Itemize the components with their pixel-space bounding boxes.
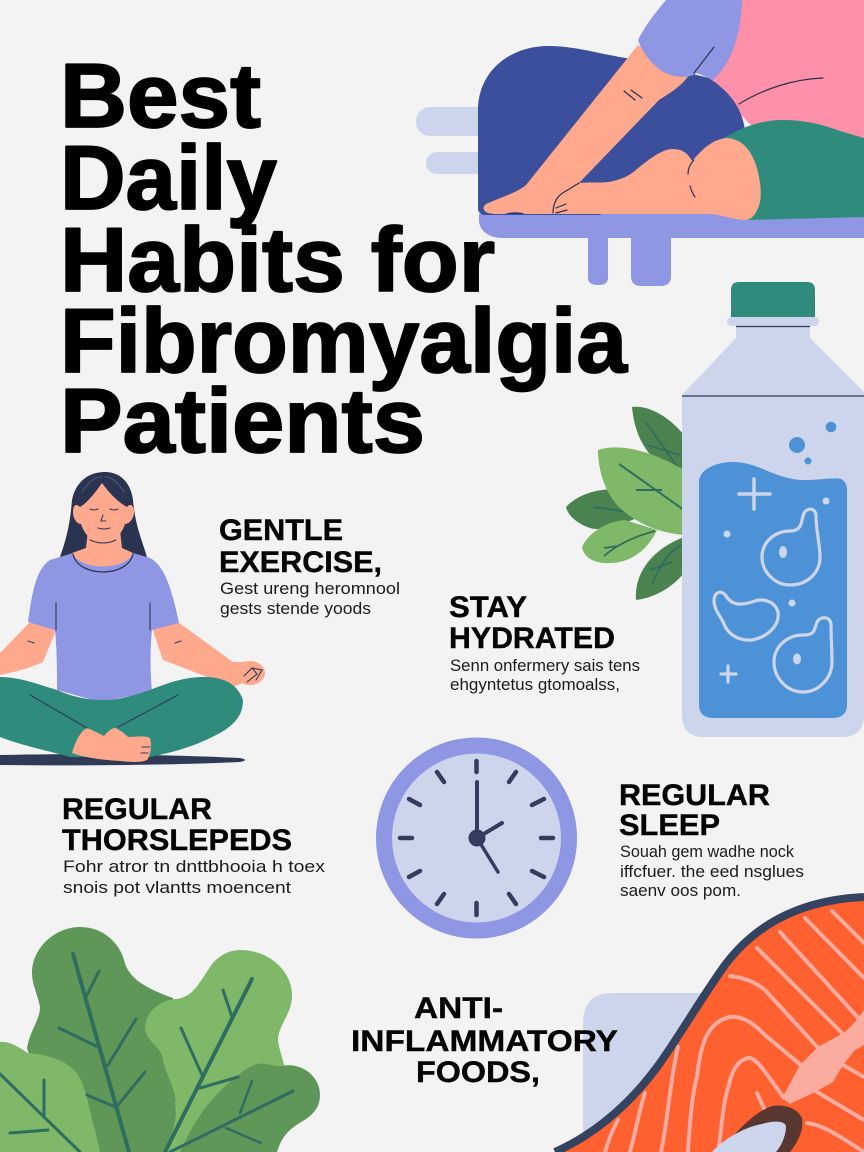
feet	[72, 728, 151, 762]
water	[699, 462, 847, 718]
section: regular sleep: REGULAR	[619, 779, 770, 812]
neck	[72, 530, 133, 570]
dark right leaf	[180, 1064, 320, 1152]
face	[73, 483, 134, 544]
light middle leaf	[145, 950, 292, 1152]
section: regular sleep: Souah gem wadhe nock	[620, 843, 795, 861]
section: gentle exercise: gests stende yoods	[220, 600, 371, 618]
bottle body	[682, 326, 864, 737]
green garment	[724, 120, 864, 220]
section: anti-inflammatory foods: INFLAMMATORY	[351, 1025, 618, 1058]
title: Best	[60, 46, 261, 147]
illustration: leafy greens	[0, 927, 320, 1152]
title: Habits for	[60, 210, 495, 311]
section: stay hydrated: HYDRATED	[449, 622, 615, 655]
section: gentle exercise: Gest ureng heromnool	[220, 580, 400, 598]
hand	[235, 661, 265, 685]
illustration: woman meditating	[0, 472, 265, 765]
section: gentle exercise: EXERCISE,	[219, 546, 382, 579]
section: gentle exercise: GENTLE	[219, 514, 343, 547]
illustration: water bottle with leaves	[566, 282, 864, 737]
face lines	[28, 477, 181, 643]
upper arm / leg	[484, 45, 690, 214]
mat	[0, 754, 245, 765]
title: Patients	[60, 371, 425, 472]
pants and hand lines	[30, 668, 262, 753]
section: stay hydrated: STAY	[449, 591, 527, 624]
pink background shape	[710, 0, 864, 140]
light left leaf	[0, 1042, 100, 1152]
salmon flesh	[555, 897, 864, 1152]
pale backing panel	[583, 993, 720, 1152]
illustration: salmon fillet	[555, 897, 864, 1152]
section: stay hydrated	[449, 591, 640, 694]
motion bars	[416, 107, 496, 174]
section: anti-inflammatory foods: FOODS,	[416, 1056, 540, 1089]
leaf veins	[0, 954, 293, 1152]
section: regular thorsleps: Fohr atror tn dnttbhooia h toex	[63, 858, 326, 876]
lavender sleeve	[638, 0, 742, 80]
section: stay hydrated: Senn onfermery sais tens	[450, 657, 640, 675]
table	[479, 214, 864, 286]
section: anti-inflammatory foods: ANTI-	[414, 992, 503, 1025]
dark blue cushion	[478, 46, 745, 215]
section: gentle exercise	[219, 514, 400, 618]
section: regular thorsleps	[62, 793, 326, 897]
section: regular thorsleps: REGULAR	[62, 793, 212, 826]
fat lines	[605, 911, 864, 1152]
title: Daily	[60, 128, 277, 229]
bottle cap	[731, 282, 815, 317]
lower leg	[553, 138, 761, 220]
section: regular thorsleps: THORSLEPEDS	[62, 824, 292, 857]
arms	[0, 622, 262, 687]
section: anti-inflammatory foods	[351, 992, 618, 1089]
section: stay hydrated: ehgyntetus gtomoalss,	[450, 676, 620, 694]
icon: wall clock	[376, 738, 577, 938]
shirt	[28, 553, 179, 702]
title	[60, 46, 628, 472]
hair	[60, 472, 147, 557]
bone cross-section	[712, 1106, 802, 1152]
section: regular thorsleps: snois pot vlantts moencent	[63, 879, 291, 897]
bubbles	[789, 422, 836, 464]
central fat band	[782, 1010, 864, 1104]
neck opening	[80, 545, 127, 564]
pants	[0, 677, 243, 757]
outer skin	[555, 897, 864, 1152]
section: regular sleep: SLEEP	[619, 809, 720, 842]
clock ticks	[400, 761, 553, 915]
dark leaf	[27, 927, 177, 1152]
illustration: massage on treatment table	[416, 0, 864, 286]
section: regular sleep: saenv oos pom.	[620, 882, 741, 900]
section: regular sleep	[619, 779, 804, 900]
title: Fibromyalgia	[60, 291, 628, 392]
clock hands	[477, 782, 502, 872]
ink lines	[553, 47, 823, 213]
water symbols	[714, 479, 832, 692]
leaves	[566, 407, 684, 600]
section: regular sleep: iffcfuer. the eed nsglues	[620, 863, 804, 881]
